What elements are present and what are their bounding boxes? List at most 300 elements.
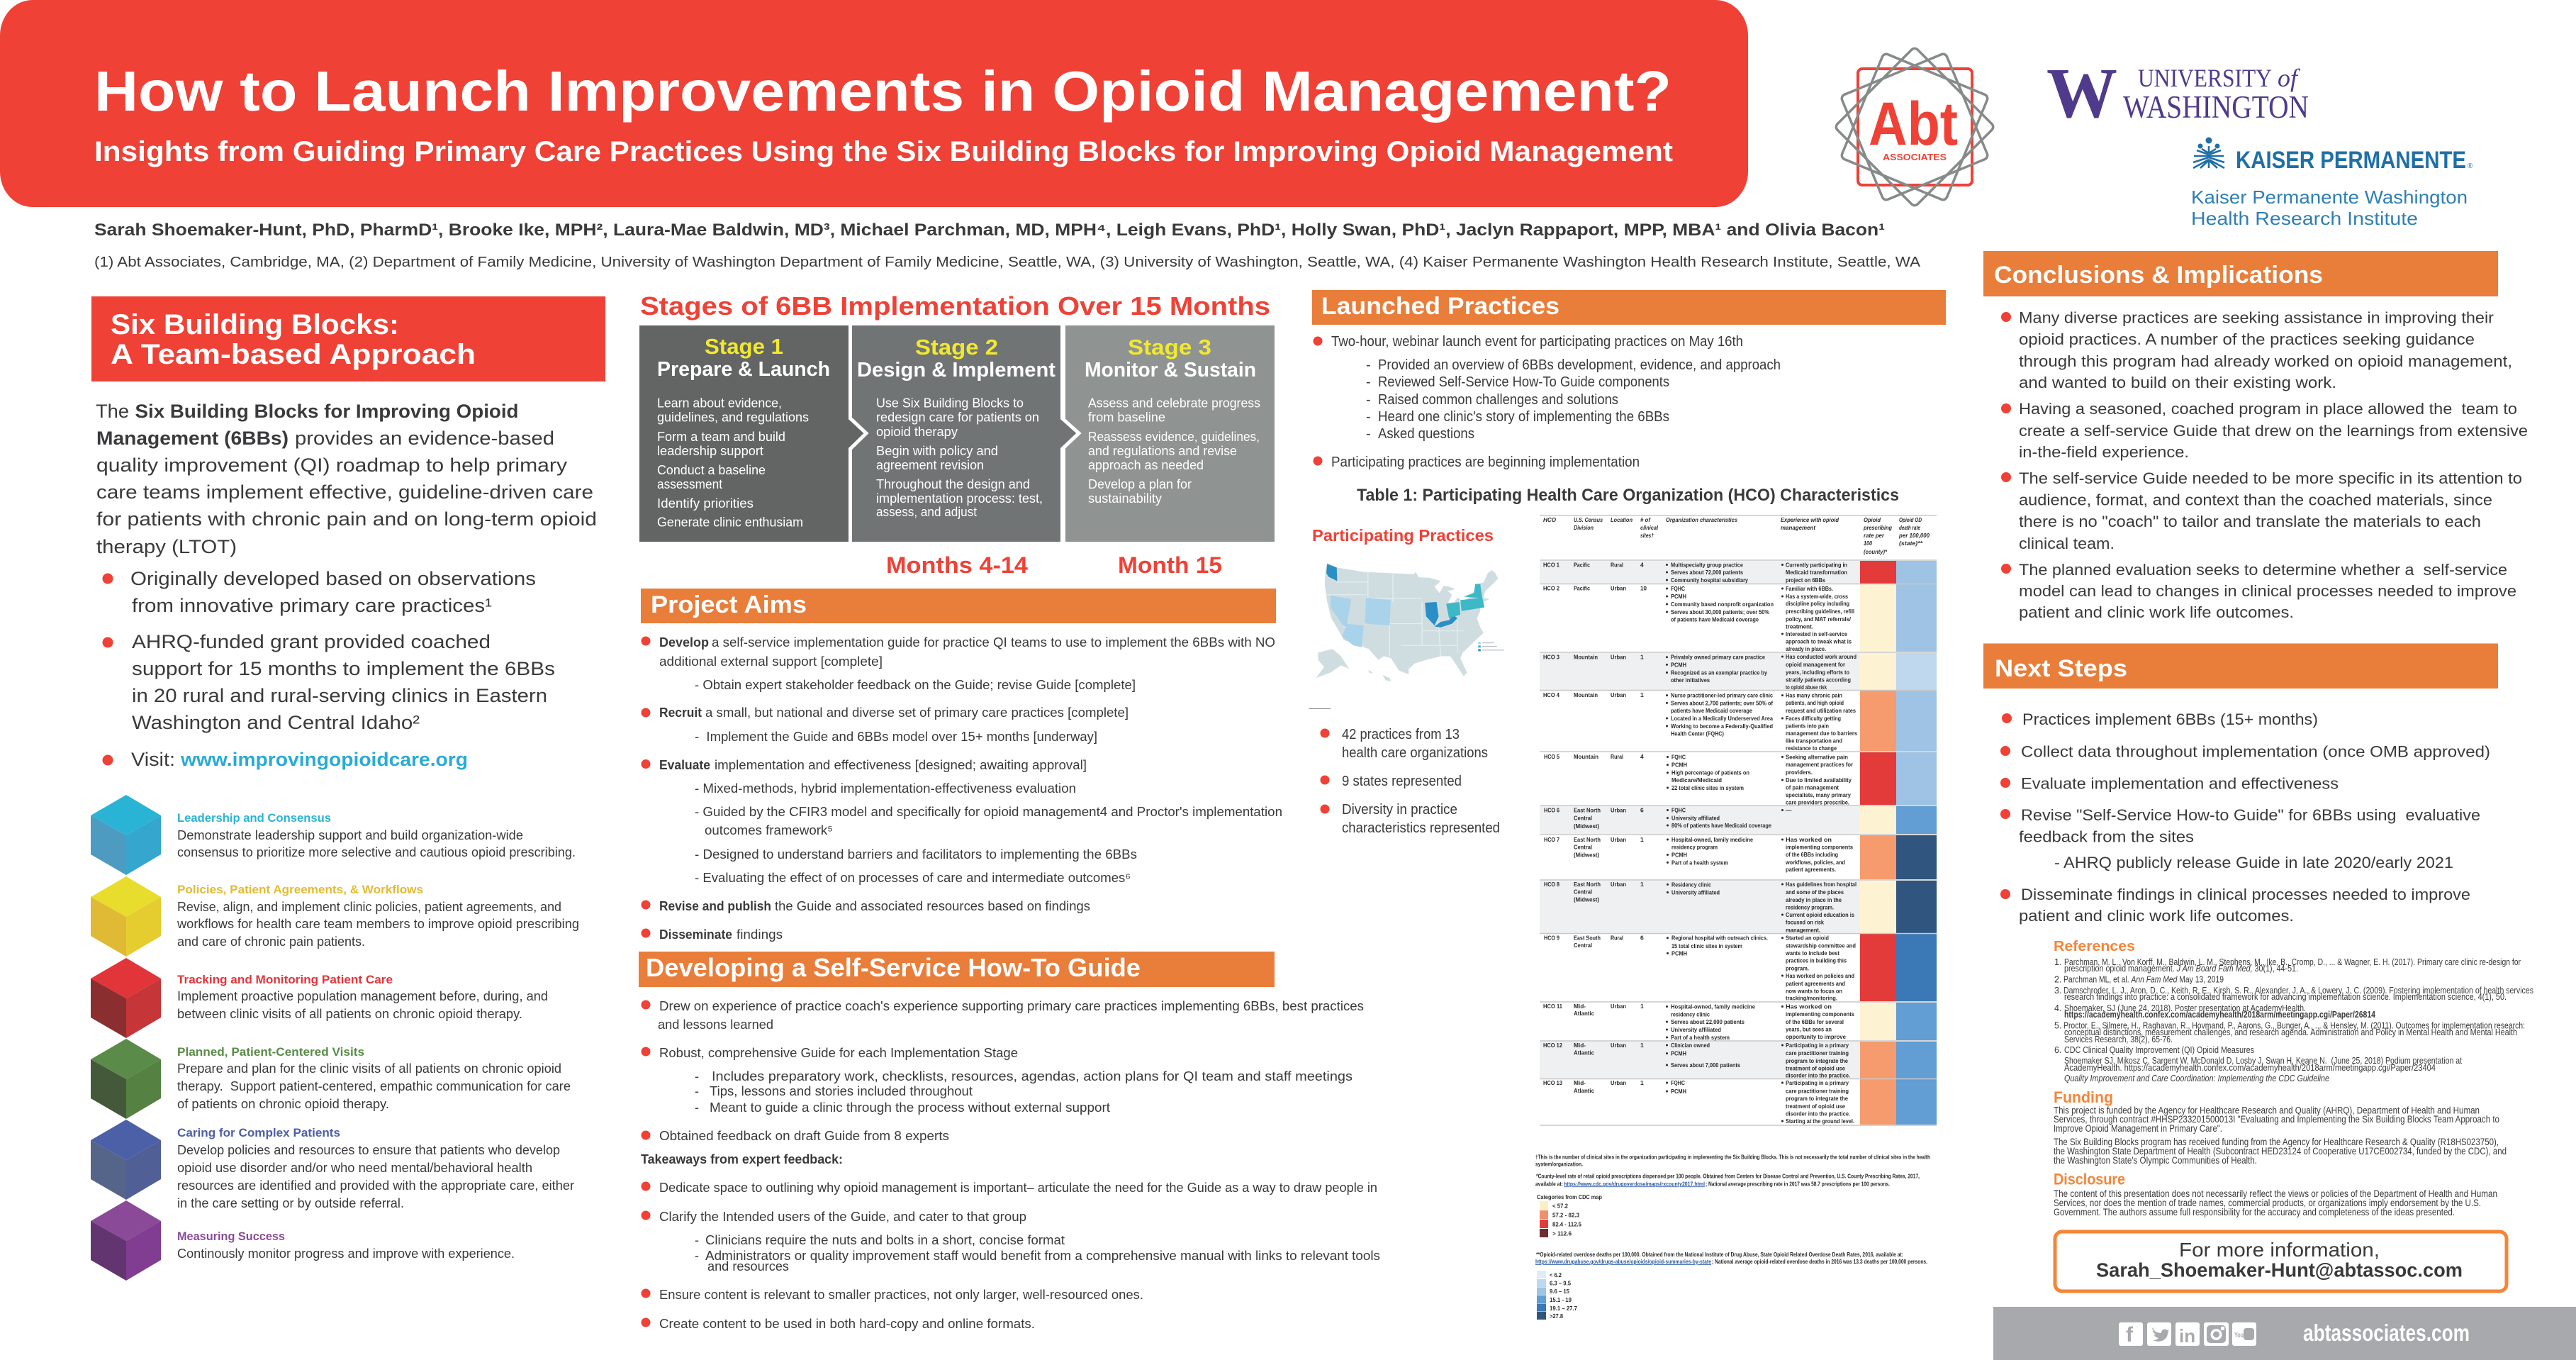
row: HCO 1: Medicaid transformation: [1786, 569, 1847, 576]
row: HCO 11: implementing components: [1786, 1010, 1854, 1018]
footnote: prescribing rates: *County-level rate of retail opioid prescriptions dispensed per 100 people. Obtained from Centers for Disease Control and Prevention, U.S. County Prescribing Rates, 2017,: [1536, 1173, 1920, 1180]
guide list: Meant to guide a clinic through the process without external support: [710, 1100, 1110, 1115]
row: HCO 9: HCO 9: [1544, 934, 1559, 941]
table header: sites†: [1640, 532, 1654, 539]
reference list: 6.: [2054, 1045, 2061, 1055]
row: HCO 2: Serves about 30,000 patients; over 50%: [1671, 608, 1769, 615]
row: HCO 12: HCO 12: [1543, 1042, 1562, 1049]
row: HCO 5: PCMH: [1671, 762, 1687, 769]
aims list: a small, but national and diverse set of primary care practices [complete]: [705, 706, 1129, 720]
row: HCO 5: Medicare/Medicaid: [1671, 776, 1722, 784]
row: HCO 7: Part of a health system: [1671, 859, 1728, 866]
heading: six building blocks: [91, 296, 605, 381]
row: HCO 9: now wants to focus on: [1786, 987, 1842, 994]
table header: per 100,000: [1898, 532, 1930, 539]
row: HCO 5: FQHC: [1671, 753, 1686, 760]
heading: disclosure: Disclosure: [2054, 1170, 2125, 1188]
row: HCO 8: Current opioid education is: [1786, 911, 1854, 918]
block 4: planned visits: [91, 1039, 571, 1119]
row: HCO 9: program.: [1786, 965, 1809, 972]
row: HCO 7: East North: [1574, 836, 1601, 843]
table header: clinical: [1640, 524, 1659, 531]
aims list: - Designed to understand barriers and facilitators to implementing the 6BBs: [695, 847, 1137, 862]
panel: launched practices: [1309, 290, 1946, 836]
stage 3 steps: from baseline: [1088, 410, 1165, 424]
row: HCO 12: PCMH: [1671, 1050, 1686, 1057]
reference list: https://academyhealth.confex.com/academyhealth/2018arm/meetingapp.cgi/Paper/26814: [2064, 1010, 2375, 1020]
row: HCO 3: other initiatives: [1671, 676, 1710, 684]
row: HCO 6: [1544, 807, 1792, 830]
block 3: tracking and monitoring: Tracking and Monitoring Patient Care: [177, 973, 393, 986]
reference list: research findings into practice: a consolidated framework for advancing implementation science. Implementation science, 4(1), 50.: [2064, 992, 2507, 1002]
guide list: [641, 999, 1380, 1331]
stage 3 box: Stage 3: [1128, 335, 1211, 359]
footnote: prescribing rates: https://www.cdc.gov/drugoverdose/maps/rxcounty2017.html: [1564, 1180, 1705, 1187]
heading: project aims: Project Aims: [651, 591, 807, 618]
stage 2 steps: Use Six Building Blocks to: [876, 396, 1024, 410]
row: HCO 8: focused on risk: [1786, 919, 1824, 926]
aims list: implementation and effectiveness [designed; awaiting approval]: [715, 758, 1087, 772]
row: HCO 1: Multispecialty group practice: [1671, 562, 1743, 569]
table header: Organization characteristics: [1666, 516, 1737, 523]
legend: CDC prescribing categories: 82.4 - 112.5: [1552, 1221, 1581, 1228]
legend: CDC prescribing categories: < 57.2: [1552, 1202, 1568, 1209]
row: HCO 13: Starting at the ground level.: [1786, 1117, 1854, 1125]
row: HCO 11: Hospital-owned, family medicine: [1671, 1003, 1755, 1010]
footer bar: [1993, 1307, 2576, 1360]
row: HCO 5: Rural: [1611, 753, 1623, 760]
table header: (state)**: [1899, 540, 1923, 547]
row: HCO 3: years, including efforts to: [1786, 669, 1849, 676]
row: HCO 4: like transportation and: [1786, 737, 1842, 745]
logo: University of Washington: WASHINGTON: [2123, 89, 2309, 125]
row: HCO 3: HCO 3: [1543, 654, 1559, 661]
row: HCO 5: care providers prescribe.: [1786, 798, 1849, 806]
row: HCO 7: of the 6BBs including: [1786, 851, 1838, 858]
row: HCO 4: Health Center (FQHC): [1671, 730, 1724, 737]
reference list: CDC Clinical Quality Improvement (QI) Opioid Measures: [2064, 1045, 2254, 1055]
next steps list: Disseminate findings in clinical processes needed to improve: [2021, 886, 2470, 903]
row: HCO 1: project on 6BBs: [1786, 576, 1825, 584]
icon: linkedin: in: [2179, 1325, 2195, 1347]
row: HCO 4: management due to barriers: [1786, 730, 1857, 737]
stage 3 steps: and regulations and revise: [1088, 444, 1237, 458]
reference list: prescription opioid management. J Am Board Fam Med, 30(1), 44-51.: [2064, 964, 2298, 974]
row: HCO 9: 15 total clinic sites in system: [1671, 942, 1742, 949]
reference list: AcademyHealth. https://academyhealth.confex.com/academyhealth/2018arm/meetingapp.cgi/Paper/23404: [2064, 1063, 2436, 1073]
icon: youtube: You: [2234, 1332, 2244, 1339]
panel: six building blocks: [91, 296, 605, 1281]
callout: contact box: [2055, 1232, 2507, 1291]
block 2: policies: Revise, align, and implement clinic policies, patient agreements, and: [177, 900, 561, 914]
reference list: Shoemaker SJ, Mikosz C, Sargent W, McDonald D, Losby J, Swan H, Keane N. (June 25, 2018) Podium presentation at: [2064, 1056, 2462, 1066]
row: HCO 6: (Midwest): [1574, 823, 1599, 830]
logo: University of Washington: of: [2278, 64, 2301, 92]
legend: CDC prescribing categories: > 112.6: [1552, 1230, 1572, 1237]
practices facts list: characteristics represented: [1342, 820, 1500, 836]
panel: references: [2054, 939, 2533, 1083]
logo: Kaiser Permanente: KAISER PERMANENTE: [2236, 147, 2466, 174]
row: HCO 2: Has a system-wide, cross: [1786, 593, 1848, 600]
aims list: - Evaluating the effect of on processes of care and intermediate outcomes⁶: [695, 871, 1131, 885]
footnote: prescribing rates: available at:: [1535, 1180, 1563, 1187]
row: HCO 12: Urban: [1611, 1042, 1626, 1049]
block 4: planned visits: of patients on chronic opioid therapy.: [177, 1097, 389, 1111]
launch event list: Raised common challenges and solutions: [1378, 392, 1618, 408]
row: HCO 7: Hospital-owned, family medicine: [1671, 836, 1753, 843]
aims list: additional external support [complete]: [659, 654, 883, 669]
bullet list: support for 15 months to implement the 6BBs: [132, 658, 555, 679]
block 5: complex patients: opioid use disorder and/or who need mental/behavioral health: [177, 1161, 532, 1175]
row: HCO 4: 1: [1640, 691, 1644, 698]
row: HCO 3: [1543, 653, 1857, 691]
legend: overdose death categories: 6.3 – 9.5: [1550, 1280, 1571, 1287]
block 6: measuring success: Continously monitor progress and improve with experience.: [177, 1247, 515, 1261]
row: HCO 7: Has worked on: [1786, 836, 1832, 843]
icon: facebook: f: [2126, 1323, 2134, 1347]
aims list: - Guided by the CFIR3 model and specifically for opioid management4 and Proctor's implementation: [695, 805, 1282, 819]
conclusions list: model can lead to changes in clinical processes needed to improve: [2019, 582, 2516, 600]
row: HCO 5: management practices for: [1786, 761, 1854, 768]
row: HCO 2: prescribing guidelines, refill: [1786, 608, 1854, 615]
funding text: The Six Building Blocks program has received funding from the Agency for Healthcare Research & Quality (R18HS023750),: [2054, 1137, 2499, 1147]
row: HCO 1: [1543, 562, 1847, 584]
row: HCO 5: of pain management: [1786, 784, 1839, 791]
footnote: overdose deaths: https://www.drugabuse.gov/drugs-abuse/opioids/opioid-summaries-by-state: [1535, 1258, 1711, 1265]
stage 3 steps: Assess and celebrate progress: [1088, 396, 1260, 410]
row: HCO 13: Mid-: [1574, 1079, 1586, 1086]
intro text: for patients with chronic pain and on long-term opioid: [96, 508, 597, 530]
row: HCO 8: [1544, 881, 1857, 933]
next steps list: feedback from the sites: [2019, 828, 2194, 845]
row: HCO 9: Started an opioid: [1786, 935, 1829, 942]
footnote: prescribing rates: [1535, 1173, 1920, 1187]
guide list: -: [695, 1084, 699, 1098]
row: HCO 8: Urban: [1611, 881, 1626, 888]
row: HCO 7: (Midwest): [1574, 852, 1599, 859]
guide list: Robust, comprehensive Guide for each Implementation Stage: [659, 1046, 1018, 1060]
icon: youtube: [2232, 1322, 2256, 1346]
block 2: policies: workflows for health care team members to improve opioid prescribing: [177, 917, 579, 931]
stage 2 steps: assess, and adjust: [876, 505, 977, 519]
row: HCO 6: 6: [1640, 807, 1644, 814]
launch event list: Asked questions: [1378, 426, 1474, 442]
intro text: The: [96, 401, 129, 422]
table header: death rate: [1899, 524, 1920, 531]
bullet list: Visit:: [131, 749, 175, 770]
bullet list: www.improvingopioidcare.org: [180, 749, 468, 770]
guide list: Ensure content is relevant to smaller practices, not only larger, well-resourced ones.: [659, 1288, 1143, 1302]
authors: Sarah Shoemaker-Hunt, PhD, PharmD¹, Brooke Ike, MPH², Laura-Mae Baldwin, MD³, Michael Parchman, MD, MPH⁴, Leigh Evans, PhD¹, Holly Swan, PhD¹, Jaclyn Rappaport, MPP, MBA¹ and Olivia Bacon¹: [94, 221, 1885, 240]
disclosure text: Government. The authors assume full responsibility for the accuracy and completeness of the ideas presented.: [2054, 1207, 2455, 1217]
footnote: clinic sites: †This is the number of clinical sites in the organization participating in implementing the Six Building Blocks. This is not necessarily the total number of clinical sites in the health: [1535, 1153, 1930, 1160]
table header: Experience with opioid: [1781, 516, 1839, 523]
row: HCO 9: wants to include best: [1785, 949, 1839, 957]
bullet list: in 20 rural and rural-serving clinics in Eastern: [132, 685, 547, 706]
row: HCO 2: PCMH: [1671, 593, 1686, 600]
heading: six building blocks: A Team-based Approach: [111, 339, 476, 370]
footnote: overdose deaths: **Opioid-related overdose deaths per 100,000. Obtained from the National Institute of Drug Abuse, State Opioid Related Overdose Death Rates, 2016, available at:: [1536, 1251, 1903, 1258]
row: HCO 3: stratify patients according: [1786, 676, 1851, 684]
row: HCO 12: program to integrate the: [1786, 1057, 1848, 1064]
row: HCO 13: program to integrate the: [1786, 1095, 1848, 1102]
launch event list: Reviewed Self-Service How-To Guide components: [1378, 374, 1669, 390]
aims list: findings: [737, 927, 783, 942]
legend: overdose death categories: >27.8: [1550, 1312, 1563, 1320]
table header: Location: [1611, 516, 1633, 523]
stage 1 steps: assessment: [657, 477, 722, 491]
row: HCO 3: to opioid abuse risk: [1786, 684, 1827, 691]
next steps list: [2000, 710, 2490, 925]
row: HCO 7: implementing components: [1786, 844, 1853, 851]
row: HCO 3: Privately owned primary care practice: [1671, 654, 1765, 661]
conclusions list: patient and clinic work life outcomes.: [2019, 603, 2294, 621]
reference list: [2054, 957, 2533, 1083]
disclosure text: The content of this presentation does not necessarily reflect the views or policies of the Department of Health and Human: [2054, 1188, 2497, 1199]
row: HCO 8: Residency clinic: [1671, 881, 1711, 888]
aims list: Revise and publish: [659, 899, 771, 913]
launch event list: [1313, 334, 1781, 470]
block 2: policies: [91, 876, 579, 957]
legend: overdose death categories: < 6.2: [1550, 1271, 1562, 1278]
reference list: 4.: [2054, 1003, 2061, 1013]
icon: twitter: [2147, 1322, 2171, 1346]
footnote: prescribing rates: ; National average prescribing rate in 2017 was 58.7 prescriptions per 100 persons.: [1706, 1180, 1890, 1187]
row: HCO 13: Atlantic: [1574, 1087, 1594, 1094]
logo: Kaiser Permanente: Health Research Institute: [2191, 208, 2418, 229]
row: HCO 4: resistance to change: [1786, 745, 1837, 752]
table header: Division: [1574, 524, 1594, 531]
row: HCO 11: Serves about 22,000 patients: [1671, 1018, 1745, 1025]
heading: funding: Funding: [2054, 1088, 2113, 1106]
footnote: clinic sites: [1535, 1153, 1930, 1167]
intro text: quality improvement (QI) roadmap to help primary: [96, 455, 568, 476]
conclusions list: The planned evaluation seeks to determine whether a self-service: [2019, 561, 2507, 579]
row: HCO 5: HCO 5: [1544, 753, 1559, 760]
aims list: - Mixed-methods, hybrid implementation-effectiveness evaluation: [695, 781, 1076, 796]
row: HCO 12: treatment of opioid use: [1786, 1064, 1845, 1071]
stage 1 steps: Conduct a baseline: [657, 463, 766, 477]
guide list: Drew on experience of practice coach's experience supporting primary care practices implementing 6BBs, best practices: [659, 999, 1364, 1013]
row: HCO 4: Serves about 2,700 patients; over 50% of: [1671, 699, 1773, 706]
row: HCO 1: Currently participating in: [1786, 562, 1847, 569]
bullet list: [102, 568, 555, 770]
heading: launched practices: [1312, 290, 1946, 325]
row: HCO 11: Mid-: [1574, 1003, 1586, 1010]
row: HCO 8: Central: [1574, 888, 1592, 896]
footnote: overdose deaths: ; National average opioid-related overdose deaths in 2016 was 13.3 deaths per 100,000 persons.: [1712, 1258, 1927, 1265]
funding text: This project is funded by the Agency for Healthcare Research and Quality (AHRQ), Department of Health and Human: [2054, 1105, 2480, 1115]
intro text: Management (6BBs): [96, 428, 289, 449]
row: HCO 4: Working to become a Federally-Qualified: [1671, 723, 1773, 730]
row: HCO 12: care practitioner training: [1786, 1049, 1849, 1057]
guide list: -: [695, 1069, 699, 1083]
table row backgrounds and colour columns: [1540, 515, 1937, 1125]
stage 1 steps: [657, 396, 809, 529]
row: HCO 7: [1544, 836, 1853, 873]
heading: next steps: Next Steps: [1995, 655, 2127, 682]
row: HCO 6: —: [1786, 807, 1792, 814]
row: HCO 9: Rural: [1611, 934, 1623, 941]
practices facts list: health care organizations: [1342, 745, 1488, 761]
table header: [1543, 516, 1930, 555]
row: HCO 8: HCO 8: [1544, 881, 1559, 888]
row: HCO 13: disorder into the practice.: [1786, 1110, 1850, 1117]
guide list: Administrators or quality improvement staff would benefit from a comprehensive manual with links to relevant tools: [705, 1249, 1380, 1263]
row: HCO 9: Has worked on policies and: [1786, 972, 1854, 979]
heading: next steps: [1983, 644, 2498, 689]
reference list: Quality Improvement and Care Coordination: Implementing the CDC Guideline: [2064, 1074, 2329, 1083]
row: HCO 3: Mountain: [1574, 654, 1598, 661]
block 5: complex patients: resources are identified and provided with the appropriate care, either: [177, 1178, 574, 1193]
stage 3 steps: [1088, 396, 1260, 506]
stage 2 steps: agreement revision: [876, 458, 984, 472]
row: HCO 11: Part of a health system: [1671, 1034, 1730, 1041]
conclusions list: [2001, 309, 2528, 621]
aims list: - Obtain expert stakeholder feedback on the Guide; revise Guide [complete]: [695, 678, 1136, 692]
row: HCO 9: 6: [1640, 934, 1644, 941]
block 6: measuring success: [91, 1200, 515, 1281]
heading: developing guide: Developing a Self-Service How-To Guide: [646, 953, 1141, 982]
practices facts list: 42 practices from 13: [1342, 727, 1460, 742]
block 3: tracking and monitoring: Implement proactive population management before, during, and: [177, 989, 548, 1003]
guide list: Takeaways from expert feedback:: [641, 1152, 843, 1166]
block 3: tracking and monitoring: [91, 958, 548, 1038]
row: HCO 13: care practitioner training: [1786, 1088, 1849, 1095]
row: HCO 2: Pacific: [1574, 584, 1590, 591]
block 4: planned visits: Prepare and plan for the clinic visits of all patients on chronic opioid: [177, 1061, 561, 1076]
row: HCO 8: management.: [1786, 926, 1820, 933]
row: HCO 1: Pacific: [1574, 562, 1590, 569]
row: HCO 13: Urban: [1611, 1079, 1626, 1086]
guide list: Tips, lessons and stories included throughout: [710, 1084, 973, 1098]
row: HCO 13: HCO 13: [1543, 1079, 1562, 1086]
heading: six building blocks: Six Building Blocks:: [111, 309, 399, 340]
row: HCO 4: Faces difficulty getting: [1786, 715, 1841, 722]
block 4: planned visits: therapy. Support patient-centered, empathic communication for care: [177, 1079, 571, 1093]
launch event list: Provided an overview of 6BBs development, evidence, and approach: [1378, 357, 1781, 373]
guide list: Clinicians require the nuts and bolts in a short, concise format: [705, 1233, 1065, 1247]
logo: Abt Associates: [1835, 47, 1995, 207]
row: HCO 6: Central: [1574, 815, 1592, 822]
row: HCO 1: HCO 1: [1543, 562, 1559, 569]
logo: Abt Associates: Abt: [1869, 90, 1958, 158]
conclusions list: The self-service Guide needed to be more specific in its attention to: [2019, 469, 2522, 487]
stages flow chart: [639, 325, 1275, 578]
row: HCO 4: Urban: [1611, 691, 1626, 698]
funding text: the Washington State's Olympic Communities of Health.: [2054, 1155, 2257, 1166]
conclusions list: Many diverse practices are seeking assistance in improving their: [2019, 309, 2494, 326]
row: HCO 5: High percentage of patients on: [1671, 769, 1749, 776]
block 1: leadership and consensus: consensus to prioritize more selective and cautious opioid prescribing.: [177, 845, 576, 859]
stage 2 steps: implementation process: test,: [876, 491, 1043, 506]
aims list: Recruit: [659, 706, 702, 720]
bullet list: AHRQ-funded grant provided coached: [132, 631, 491, 652]
stage 1 box: Stage 1: [705, 334, 783, 359]
row: HCO 11: residency clinic: [1671, 1011, 1710, 1018]
row: HCO 11: HCO 11: [1543, 1003, 1562, 1010]
aims list: the Guide and associated resources based on findings: [775, 899, 1090, 913]
row: HCO 2: of patients have Medicaid coverage: [1671, 615, 1759, 623]
row: HCO 11: Atlantic: [1574, 1010, 1594, 1017]
panel: next steps: [1983, 644, 2498, 925]
row: HCO 1: Community hospital subsidiary: [1671, 576, 1748, 584]
heading: developing guide: [639, 952, 1275, 987]
row: HCO 1: Rural: [1611, 562, 1623, 569]
legend: overdose death categories: [1537, 1271, 1577, 1320]
row: HCO 6: FQHC: [1671, 807, 1686, 814]
row: HCO 4: request and utilization rates: [1786, 707, 1856, 714]
block 3: tracking and monitoring: between clinic visits of all patients on chronic opioid therapy.: [177, 1007, 522, 1021]
guide list: -: [695, 1233, 699, 1247]
stage 1 steps: Learn about evidence,: [657, 396, 782, 410]
practices facts list: Diversity in practice: [1342, 802, 1457, 818]
logo: Kaiser Permanente: [2191, 138, 2473, 229]
row: HCO 9: tracking/monitoring.: [1786, 995, 1837, 1002]
row: HCO 6: University affiliated: [1671, 815, 1720, 822]
practices facts list: 9 states represented: [1342, 774, 1462, 789]
row: HCO 12: Clinician owned: [1671, 1042, 1710, 1049]
legend: overdose death categories: 15.1 - 19: [1550, 1296, 1572, 1303]
row: HCO 9: East South: [1574, 934, 1601, 941]
guide list: Create content to be used in both hard-copy and online formats.: [659, 1317, 1035, 1331]
table header: Opioid: [1864, 516, 1881, 523]
conclusions list: clinical team.: [2019, 535, 2115, 552]
table header: prescribing: [1863, 524, 1893, 531]
row: HCO 3: Has conducted work around: [1786, 653, 1857, 660]
row: HCO 7: residency program: [1671, 844, 1718, 851]
stage 3 steps: sustainability: [1088, 491, 1162, 506]
block 5: complex patients: [91, 1120, 574, 1210]
row: HCO 5: providers.: [1786, 769, 1813, 776]
aims list: Disseminate: [659, 927, 732, 942]
stage 1 steps: Form a team and build: [657, 430, 785, 444]
intro text: provides an evidence-based: [295, 428, 554, 449]
row: HCO 13: 1: [1640, 1079, 1644, 1086]
row: HCO 2: FQHC: [1671, 585, 1685, 592]
row: HCO 8: (Midwest): [1574, 896, 1599, 903]
row: HCO 7: PCMH: [1671, 851, 1687, 858]
icon: linkedin: [2175, 1322, 2200, 1347]
row: HCO 2: HCO 2: [1543, 584, 1559, 591]
intro text: [96, 401, 597, 557]
row: HCO 6: East North: [1574, 807, 1601, 814]
callout: contact box: For more information,: [2179, 1239, 2380, 1261]
title banner: [0, 0, 1748, 207]
launch event list: Participating practices are beginning implementation: [1331, 455, 1640, 470]
row: HCO 8: University affiliated: [1671, 889, 1720, 896]
legend: CDC prescribing categories: Categories from CDC map: [1537, 1193, 1602, 1200]
row: HCO 4: patients have Medicaid coverage: [1671, 707, 1752, 714]
row: HCO 2: 10: [1640, 584, 1647, 591]
aims list: Evaluate: [659, 758, 710, 772]
heading: references: References: [2054, 939, 2135, 954]
block 1: leadership and consensus: Leadership and Consensus: [177, 811, 331, 825]
stage 1 steps: leadership support: [657, 444, 763, 458]
row: HCO 4: Nurse practitioner-led primary care clinic: [1671, 692, 1773, 699]
row: HCO 5: [1544, 753, 1854, 806]
row: HCO 4: [1543, 691, 1857, 752]
months labels: [886, 552, 1222, 578]
table header: # of: [1640, 516, 1651, 523]
row: HCO 8: and some of the places: [1786, 888, 1844, 896]
months labels: Month 15: [1118, 552, 1222, 578]
panel: disclosure: [2054, 1170, 2497, 1217]
row: HCO 7: workflows, policies, and: [1785, 859, 1845, 866]
row: HCO 1: 4: [1640, 562, 1644, 569]
block 5: complex patients: Caring for Complex Patients: [177, 1126, 340, 1139]
conclusions list: opioid practices. A number of the practices seeking guidance: [2019, 330, 2475, 348]
